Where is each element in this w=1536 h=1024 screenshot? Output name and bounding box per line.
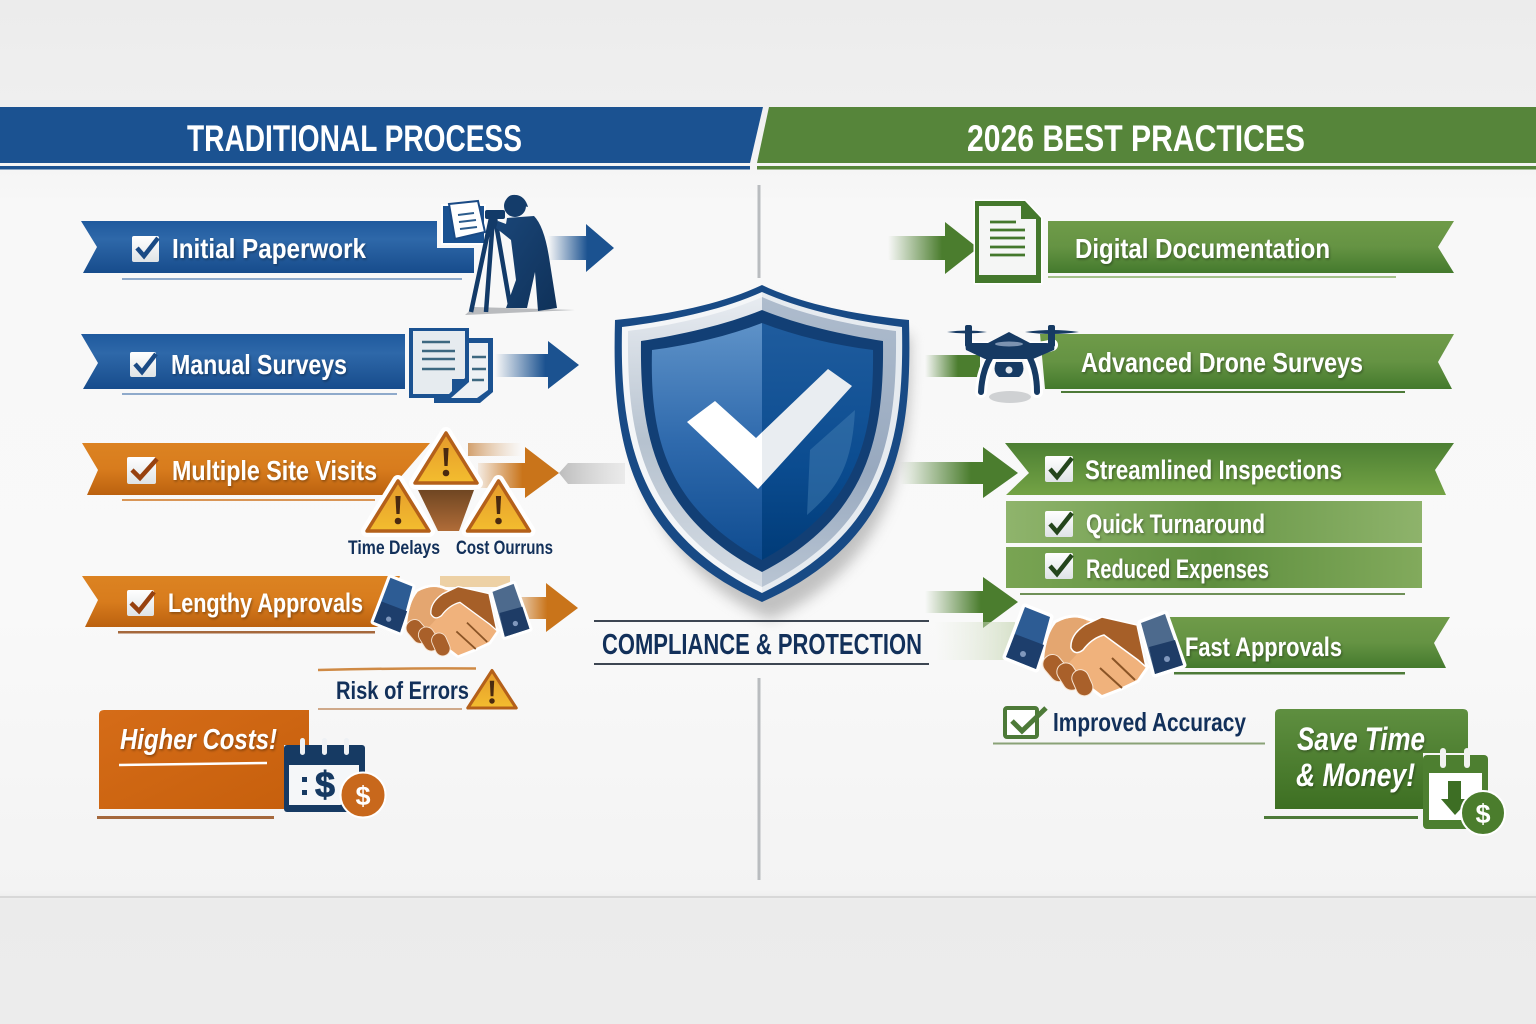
central label: COMPLIANCE & PROTECTION — [602, 629, 922, 661]
callout: save time and money: Save Time — [1297, 721, 1425, 757]
arrow: streamlined inspections — [900, 447, 1018, 498]
risk of errors callout: Risk of Errors — [336, 677, 469, 705]
icon: calendar with dollar: $ — [315, 764, 335, 805]
ribbon: streamlined inspections — [1005, 443, 1454, 495]
callout: save time and money — [1264, 709, 1468, 819]
row: reduced expenses: Reduced Expenses — [1086, 554, 1269, 584]
ribbon: fast approvals — [935, 617, 1450, 674]
ribbon: advanced drone surveys — [1040, 334, 1454, 393]
callout: save time and money: & Money! — [1296, 757, 1415, 793]
arrow stub: drone — [925, 355, 980, 377]
header: traditional process: TRADITIONAL PROCESS — [187, 118, 522, 159]
header: traditional process — [0, 107, 763, 170]
header: 2026 best practices — [757, 107, 1536, 170]
callout: higher costs: Higher Costs! — [120, 724, 277, 756]
icon: calendar with dollar — [284, 738, 386, 818]
central shield — [615, 285, 910, 620]
ribbon: streamlined inspections: Streamlined Inspections — [1085, 455, 1342, 485]
improved accuracy item: Improved Accuracy — [1053, 707, 1246, 737]
ribbon: manual surveys — [81, 334, 405, 395]
warning cluster: time delays and cost overruns — [348, 433, 553, 559]
ribbon: digital documentation: Digital Documentation — [1075, 233, 1330, 264]
arrow: lengthy approvals — [440, 576, 578, 632]
ribbon: advanced drone surveys: Advanced Drone Surveys — [1081, 347, 1363, 378]
ribbon: manual surveys: Manual Surveys — [171, 349, 347, 380]
ribbon: lengthy approvals — [82, 576, 400, 634]
arrow: initial paperwork — [548, 224, 614, 272]
row: reduced expenses — [1006, 547, 1422, 595]
icon: calendar with dollar: $ — [355, 781, 371, 811]
ribbon: initial paperwork — [81, 221, 474, 280]
arrow: digital documentation — [888, 222, 978, 274]
arrow: fast approvals — [925, 577, 1018, 628]
row: quick turnaround — [1006, 501, 1422, 543]
ribbon: digital documentation — [1048, 221, 1454, 278]
row: quick turnaround: Quick Turnaround — [1086, 509, 1265, 539]
ribbon: fast approvals: Fast Approvals — [1185, 632, 1342, 662]
callout: higher costs — [97, 710, 309, 819]
arrow: manual surveys — [495, 341, 579, 389]
icon: stacked documents — [409, 328, 493, 403]
warning cluster: time delays and cost overruns: Cost Ourruns — [456, 537, 553, 559]
ribbon: initial paperwork: Initial Paperwork — [172, 233, 366, 264]
icon: calendar with savings — [1423, 748, 1505, 835]
center divider lower — [758, 678, 760, 880]
ribbon: lengthy approvals: Lengthy Approvals — [168, 588, 363, 618]
warning cluster: time delays and cost overruns: Time Delays — [348, 537, 440, 559]
ribbon: multiple site visits — [82, 443, 430, 501]
icon: digital document — [975, 201, 1041, 283]
arrow: multiple site visits — [468, 443, 625, 498]
icon: surveyor with tripod — [465, 195, 575, 315]
icon: handshake left — [374, 578, 529, 658]
icon: calendar with savings: $ — [1475, 799, 1491, 829]
ribbon: multiple site visits: Multiple Site Visits — [172, 455, 377, 486]
icon: handshake right — [1006, 607, 1183, 699]
footer rule — [0, 896, 1536, 898]
improved accuracy item — [993, 707, 1265, 744]
icon: paperwork — [442, 201, 485, 244]
risk of errors callout — [318, 668, 516, 710]
header: 2026 best practices: 2026 BEST PRACTICES — [967, 118, 1305, 159]
icon: drone — [947, 325, 1079, 403]
center divider upper — [758, 185, 760, 278]
